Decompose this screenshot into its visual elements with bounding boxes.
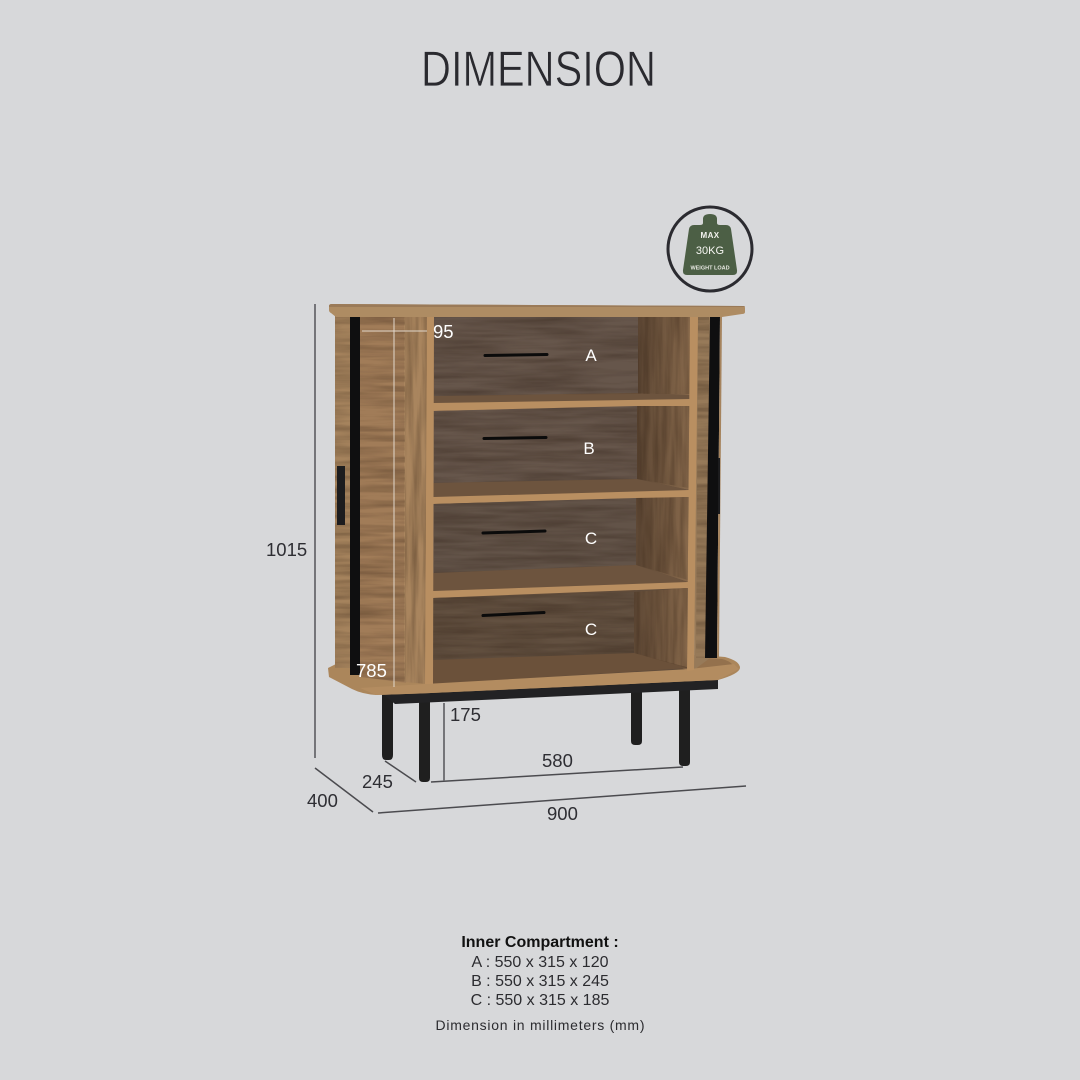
- top board: [329, 304, 745, 317]
- label 580: 580: [542, 750, 573, 771]
- bottom board front band: [360, 664, 739, 695]
- label 900: 900: [547, 803, 578, 824]
- top board highlight: [329, 304, 745, 307]
- shelf surface A: [434, 393, 690, 403]
- weight label 30kg: 30KG: [696, 245, 724, 257]
- right side panel: [694, 316, 710, 670]
- shelf surface B: [433, 479, 689, 497]
- notes heading: Inner Compartment :: [461, 934, 619, 951]
- width line 900: [378, 786, 746, 813]
- front right leg: [679, 686, 690, 766]
- left handle: [337, 466, 345, 525]
- back panel C: [433, 498, 636, 573]
- compartment label C: C: [585, 529, 597, 548]
- back panel B: [433, 406, 637, 483]
- side wall grain: [634, 316, 690, 668]
- left post side: [404, 316, 428, 684]
- unit note: Dimension in millimeters (mm): [436, 1017, 644, 1033]
- left black strip: [350, 316, 360, 675]
- compartment C: [433, 497, 688, 598]
- side wall C: [636, 497, 688, 582]
- dimension lines: [315, 304, 746, 813]
- bottom board: [328, 655, 740, 695]
- depth line 400: [315, 768, 373, 812]
- back right leg: [631, 688, 642, 745]
- weight label max: MAX: [701, 231, 720, 240]
- note B: B : 550 x 315 x 245: [471, 973, 609, 990]
- bottom board right surface: [693, 658, 733, 672]
- cabinet illustration: [328, 304, 745, 782]
- right panel grain: [696, 316, 709, 658]
- handle slot A: [485, 354, 547, 356]
- side wall A: [638, 316, 690, 399]
- white line 785 height: [393, 318, 395, 687]
- note A: A : 550 x 315 x 120: [472, 954, 609, 971]
- left post front edge: [425, 316, 434, 684]
- right black strip: [705, 316, 720, 658]
- shelf front B: [433, 490, 689, 504]
- front left leg: [419, 700, 430, 782]
- left post grain: [405, 316, 427, 684]
- handle slot D: [483, 612, 544, 616]
- dimension overlays on cabinet: [356, 318, 597, 687]
- bottom surface D: [433, 653, 690, 684]
- compartment label B: B: [583, 439, 595, 458]
- dimension labels: [266, 539, 578, 824]
- height line 1015: [314, 304, 316, 758]
- handle slot C: [483, 531, 545, 533]
- label 175: 175: [450, 704, 481, 725]
- compartment backing: [432, 316, 690, 685]
- compartment A: [433, 316, 690, 411]
- right thin panel: [717, 316, 722, 658]
- note C: C : 550 x 315 x 185: [471, 992, 609, 1009]
- back left leg: [382, 694, 393, 760]
- left side panel: [360, 316, 406, 683]
- height line 175: [443, 703, 445, 781]
- shelf front C: [433, 582, 688, 598]
- label 95: 95: [433, 321, 454, 342]
- side wall D: [634, 588, 687, 670]
- weight silhouette: [683, 214, 737, 275]
- shelf surface C: [433, 565, 688, 591]
- label 785: 785: [356, 660, 387, 681]
- compartment B: [433, 406, 689, 504]
- right handle: [718, 458, 720, 514]
- label 245: 245: [362, 771, 393, 792]
- weight label caption: WEIGHT LOAD: [690, 266, 730, 272]
- badge ring: [668, 207, 752, 291]
- left outer panel: [335, 316, 351, 668]
- compartment D: [433, 588, 690, 684]
- label 1015: 1015: [266, 539, 307, 560]
- white line 95 width: [362, 330, 427, 332]
- black base rail: [383, 678, 718, 704]
- label 400: 400: [307, 790, 338, 811]
- left side wood grain: [335, 316, 405, 682]
- handle slot B: [484, 438, 546, 439]
- icon: max weight load badge: [668, 207, 752, 291]
- back panel grain: [433, 316, 638, 660]
- inner compartment notes: [436, 934, 644, 1033]
- right post front edge: [687, 316, 698, 671]
- compartment label A: A: [585, 346, 597, 365]
- back panel A: [434, 316, 638, 396]
- side wall B: [637, 406, 689, 490]
- shelf front A: [433, 399, 690, 411]
- back panel D: [433, 592, 634, 660]
- width line 580: [431, 767, 683, 782]
- title: DIMENSION: [421, 41, 656, 97]
- compartment label C lower: C: [585, 620, 597, 639]
- depth line 245: [385, 761, 416, 782]
